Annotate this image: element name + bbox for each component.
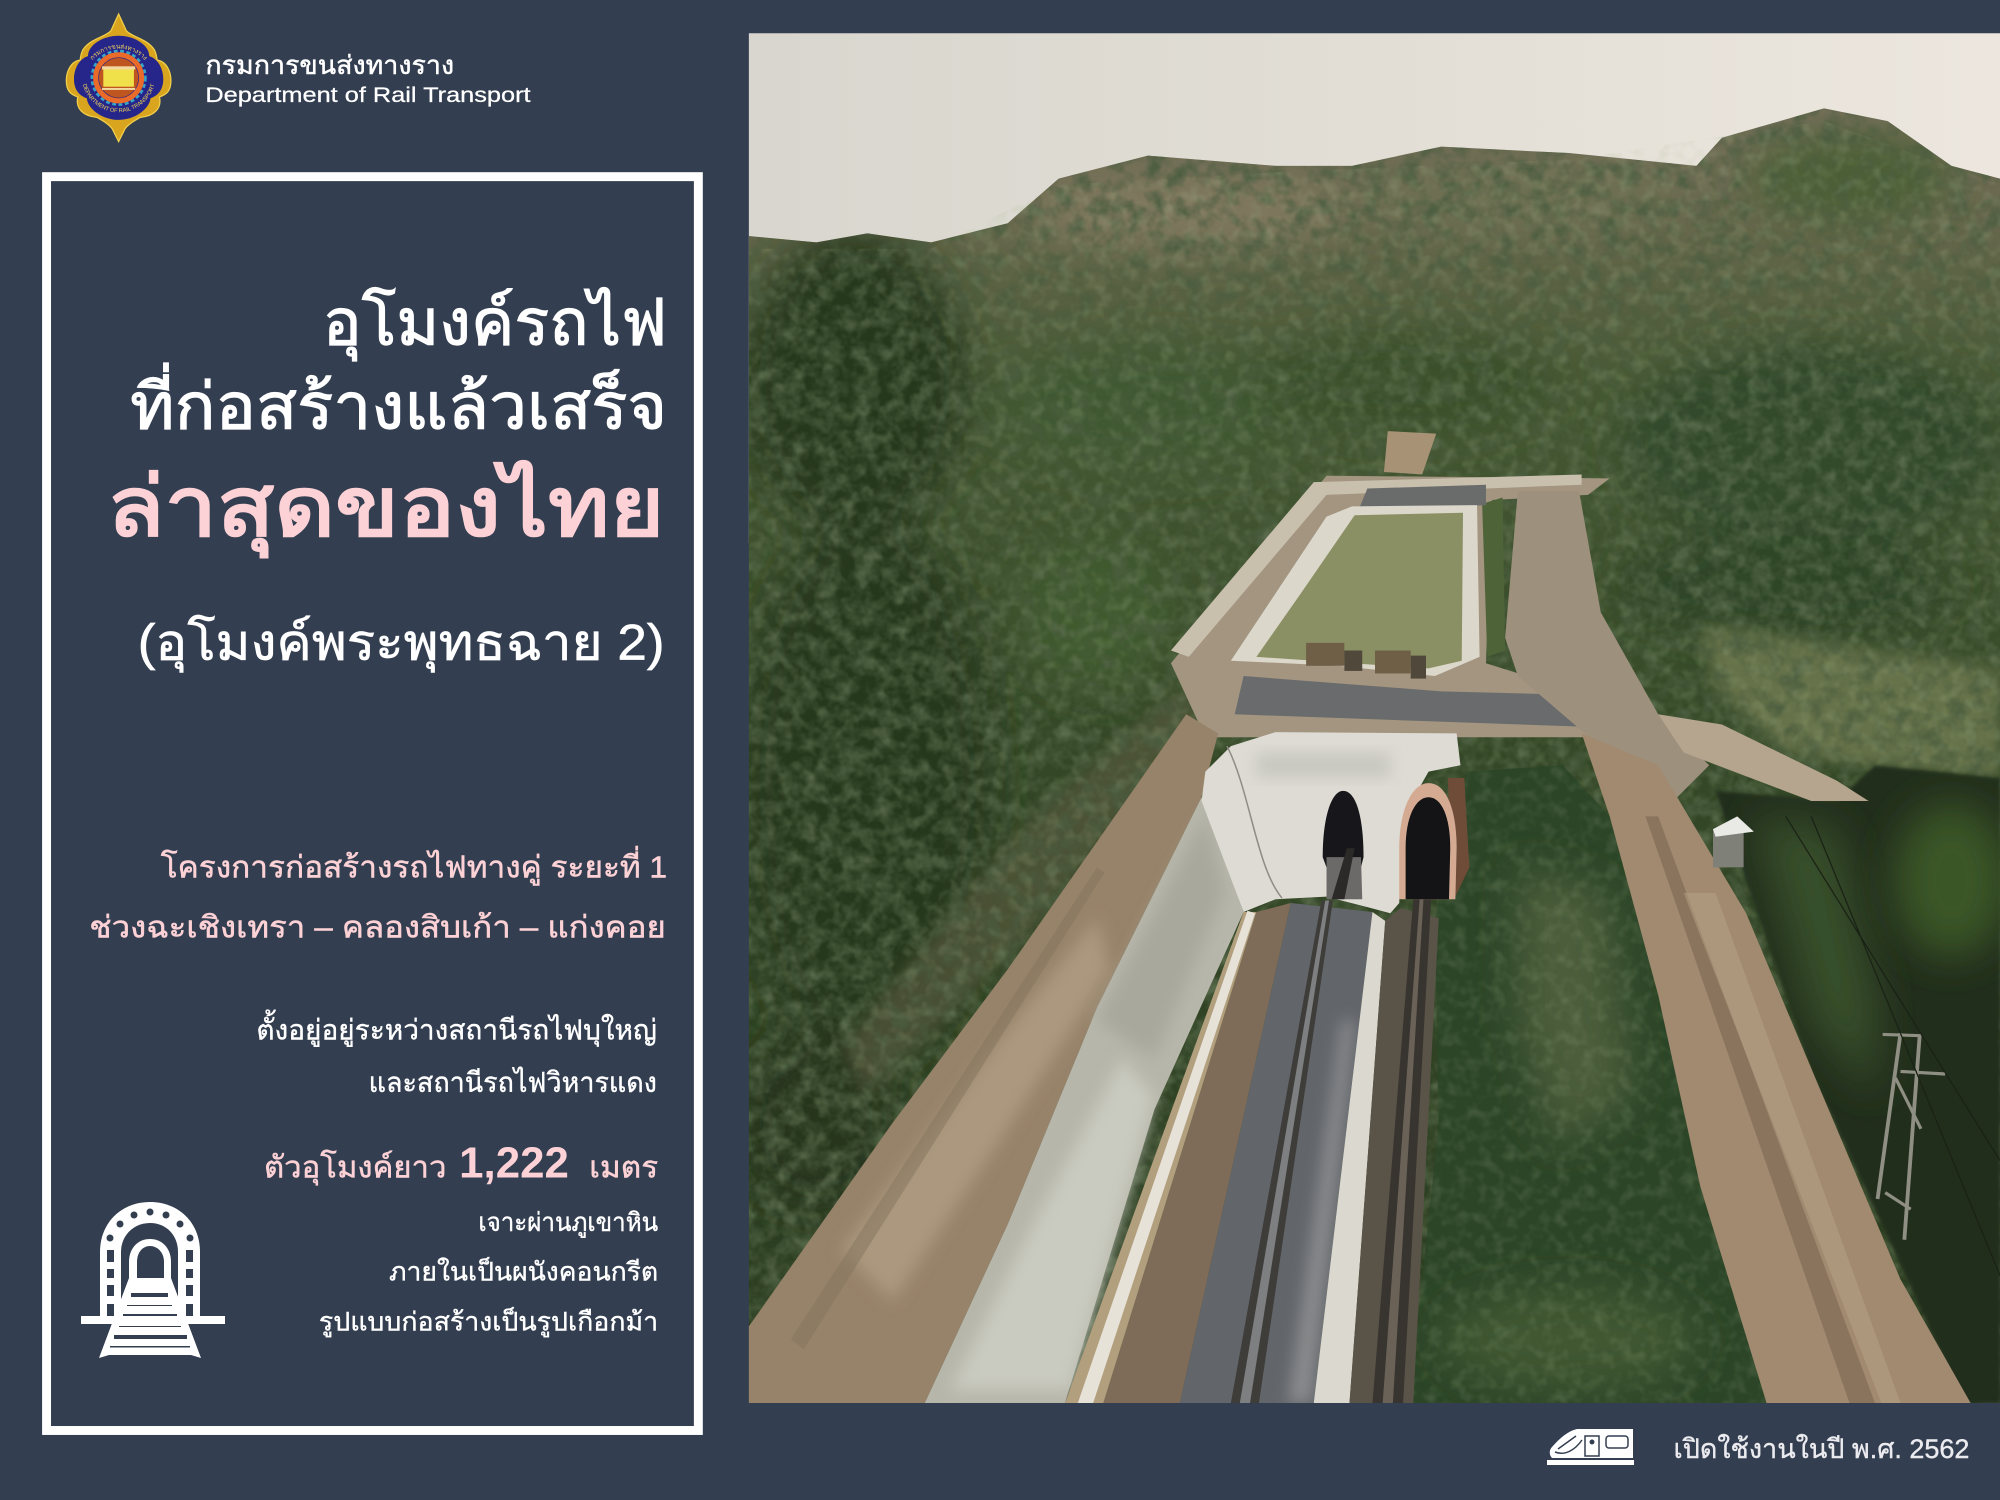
construction details: ภายในเป็นผนังคอนกรีต [389,1257,658,1287]
title: (อุโมงค์พระพุทธฉาย 2) [138,614,665,672]
main dirt road lower right [1582,733,1971,1403]
forest tree texture [749,108,2000,1403]
right tunnel mouth [1406,797,1450,899]
forest shading [740,135,2000,1212]
dry scrub along left shoulder [842,689,1205,1097]
title: อุโมงค์รถไฟ [323,286,667,361]
green bushes between tunnel and road [1409,765,1767,1403]
title: ล่าสุดของไทย [107,460,665,559]
title [107,286,667,672]
title: ที่ก่อสร้างแล้วเสร็จ [130,363,667,443]
right tunnel ring [1399,783,1457,899]
panel: text frame [47,177,698,1430]
far dirt track [1384,431,1436,474]
aerial photo: railway tunnel portals [740,33,2000,1403]
icon: tunnel with track [81,1202,225,1358]
drainage strip [1065,912,1256,1403]
ballast track bed [1180,903,1372,1403]
tunnel length: เมตร [589,1150,658,1184]
opening year text: เปิดใช้งานในปี พ.ศ. 2562 [1673,1433,1969,1464]
electric pole [1786,816,2000,1276]
sky [749,33,2000,543]
left tunnel mouth [1323,791,1364,867]
dry grass clearing [1703,625,2000,778]
concrete tunnel portal [1202,732,1460,913]
icon: train [1547,1429,1634,1465]
upper gray apron [1360,484,1486,506]
department name Thai: กรมการขนส่งทางราง [205,52,454,80]
cable on portal [1227,746,1282,898]
retaining wall edge of field [1231,505,1480,676]
left dirt shoulder [749,714,1218,1403]
hedge beside field [1482,497,1505,657]
lower right forest [1716,765,2000,1403]
dirt branch road [1658,714,1869,801]
right dirt road upper [1505,491,1709,816]
right track bed [1349,908,1439,1403]
project name [89,846,667,944]
brown trackside bed [1103,903,1291,1403]
department name English: Department of Rail Transport [205,84,531,107]
forested mountain ridge [749,108,2000,1403]
gray road [1235,676,1592,727]
dump trucks [1306,643,1426,679]
logo: department emblem: DEPARTMENT OF RAIL TRANSPORT [82,84,154,112]
project name: ช่วงฉะเชิงเทรา – คลองสิบเก้า – แก่งคอย [89,910,666,944]
soil berm beside portal [1448,778,1469,899]
construction details [319,1209,658,1337]
location: และสถานีรถไฟวิหารแดง [369,1067,657,1098]
location [256,1010,657,1098]
tan earthworks around upper field [1171,476,1610,737]
upper access road [1171,474,1582,657]
construction details: รูปแบบก่อสร้างเป็นรูปเกือกม้า [319,1306,658,1337]
location: ตั้งอยู่อยู่ระหว่างสถานีรถไฟบุใหญ่ [256,1010,657,1048]
construction details: เจาะผ่านภูเขาหิน [478,1209,658,1238]
tunnel length: ตัวอุโมงค์ยาว [264,1149,446,1186]
tunnel length [264,1139,658,1187]
white concrete strip [1314,912,1385,1403]
project name: โครงการก่อสร้างรถไฟทางคู่ ระยะที่ 1 [161,846,667,886]
small hut [1713,816,1754,867]
grass field [1256,513,1463,668]
footer: opening year [1547,1429,1969,1465]
tunnel length: 1,222 [459,1139,569,1187]
logo: department emblem: กรมการขนส่งทางราง [90,44,147,60]
concrete side slope [925,797,1244,1403]
heading: logo and department name [66,12,531,143]
logo: department emblem [66,12,172,143]
